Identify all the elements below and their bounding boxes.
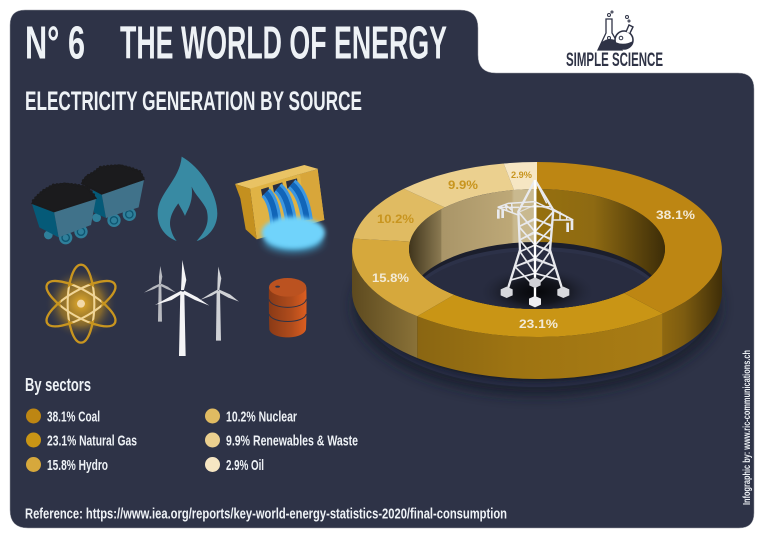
segment: coal (537, 162, 722, 314)
subtitle: ELECTRICITY GENERATION BY SOURCE (25, 86, 362, 116)
legend item: hydro (26, 457, 108, 474)
reference line: Reference: https://www.iea.org/reports/key-world-energy-statistics-2020/final-consumption (25, 506, 507, 522)
legend (26, 408, 358, 474)
segments on top surface (352, 162, 722, 337)
segment: nuclear (354, 189, 445, 242)
legend item: renewables and waste: 9.9% Renewables & Waste (226, 432, 358, 450)
segment: oil (504, 162, 537, 190)
value labels: 9.9% (448, 178, 478, 192)
legend item: oil (205, 457, 264, 474)
segment: natural gas (417, 293, 663, 337)
title: THE WORLD OF ENERGY (120, 16, 447, 68)
chart: donut of electricity generation (352, 162, 722, 396)
icon: pylon (498, 180, 573, 307)
legend item: coal: 38.1% Coal (47, 408, 100, 426)
icon: coal carts (32, 165, 144, 244)
value labels: 23.1% (519, 317, 558, 331)
title (25, 16, 447, 68)
centre turbine (155, 260, 209, 356)
logo: simple science (566, 11, 663, 71)
legend item: natural gas (26, 432, 137, 450)
legend item: nuclear (205, 408, 297, 426)
value labels: 2.9% (511, 170, 532, 180)
right turbine (200, 267, 239, 341)
value labels (372, 170, 695, 331)
segment: renewables (404, 164, 514, 207)
outer wall (352, 250, 722, 379)
front cart (32, 183, 96, 244)
donut shadow (353, 207, 721, 396)
value labels: 38.1% (656, 208, 695, 222)
icon: flasks (598, 11, 633, 50)
left turbine (144, 266, 176, 322)
value labels: 10.2% (377, 212, 414, 226)
icon: atom (41, 265, 121, 343)
value labels: 15.8% (372, 271, 409, 285)
legend item: nuclear: 10.2% Nuclear (226, 408, 297, 426)
segment: hydro (352, 239, 454, 316)
icon: wind turbines (144, 260, 239, 356)
rear cart (82, 165, 144, 227)
legend item: natural gas: 23.1% Natural Gas (47, 432, 137, 450)
title: N° 6 (25, 16, 85, 68)
heading: by sectors: By sectors (25, 375, 91, 395)
legend item: renewables and waste (205, 432, 358, 450)
inner wall and floor (409, 189, 665, 309)
icon: oil barrel (269, 278, 307, 337)
icon: hydro dam (235, 165, 325, 252)
logo text: SIMPLE SCIENCE (566, 50, 663, 71)
legend item: coal (26, 408, 100, 426)
icon: gas flame (158, 157, 217, 241)
legend item: hydro: 15.8% Hydro (47, 457, 108, 474)
credit: Infographic by: www.ric-communications.ch (742, 350, 753, 505)
legend item: oil: 2.9% Oil (226, 457, 264, 474)
